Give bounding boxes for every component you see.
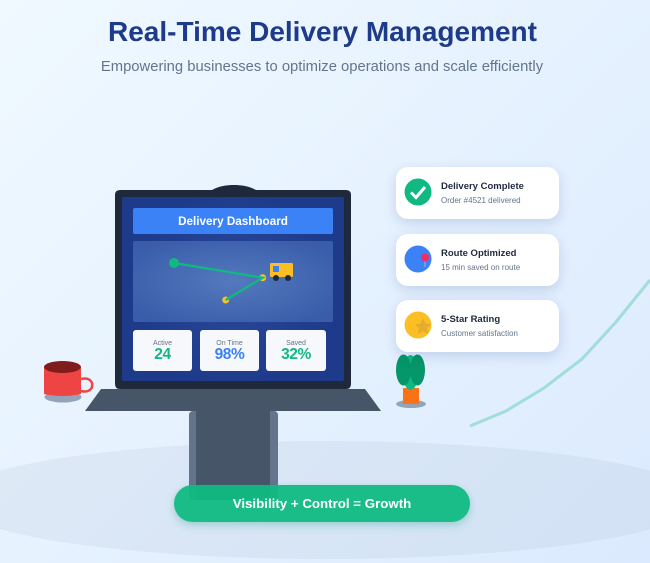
dashboard header: Delivery Dashboard <box>178 215 288 228</box>
desk top <box>85 389 381 411</box>
dashboard header <box>133 208 333 234</box>
notification: delivery complete: Order #4521 delivered <box>441 196 521 204</box>
icon: pin <box>404 246 432 272</box>
icon: star <box>404 312 432 338</box>
route stop 1 <box>259 274 266 281</box>
stat: active <box>133 330 192 371</box>
coffee mug <box>44 361 94 402</box>
notification: 5-star rating: 5-Star Rating <box>441 314 500 324</box>
stat: active: Active <box>153 340 172 346</box>
notification: 5-star rating <box>396 300 559 352</box>
notification: delivery complete <box>396 167 559 219</box>
notification: 5-star rating: Customer satisfaction <box>441 328 518 338</box>
route start point <box>169 258 179 268</box>
subtitle: Empowering businesses to optimize operations and scale efficiently <box>101 59 543 75</box>
stat: saved <box>266 330 326 371</box>
stat: active: 24 <box>154 346 171 363</box>
map panel <box>133 241 333 322</box>
tagline pill <box>174 485 470 522</box>
notification: delivery complete: Delivery Complete <box>441 180 524 192</box>
desk stand <box>189 411 278 486</box>
stat: on time <box>200 330 259 371</box>
stat: on time: 98% <box>215 346 244 363</box>
notification: route optimized: Route Optimized <box>441 248 516 258</box>
potted plant <box>396 354 426 408</box>
delivery truck <box>270 263 293 281</box>
tagline pill: Visibility + Control = Growth <box>233 496 411 511</box>
notification: route optimized <box>396 234 559 286</box>
stat: saved: Saved <box>286 340 306 346</box>
notification: route optimized: 15 min saved on route <box>441 262 520 272</box>
stat: on time: On Time <box>216 340 243 346</box>
monitor screen <box>122 197 344 381</box>
icon: check <box>404 178 432 206</box>
title: Real-Time Delivery Management <box>108 16 537 47</box>
monitor <box>115 185 351 389</box>
route lines <box>174 263 263 300</box>
stat: saved: 32% <box>281 346 311 363</box>
monitor frame <box>115 185 351 389</box>
route stop 2 <box>222 296 229 304</box>
